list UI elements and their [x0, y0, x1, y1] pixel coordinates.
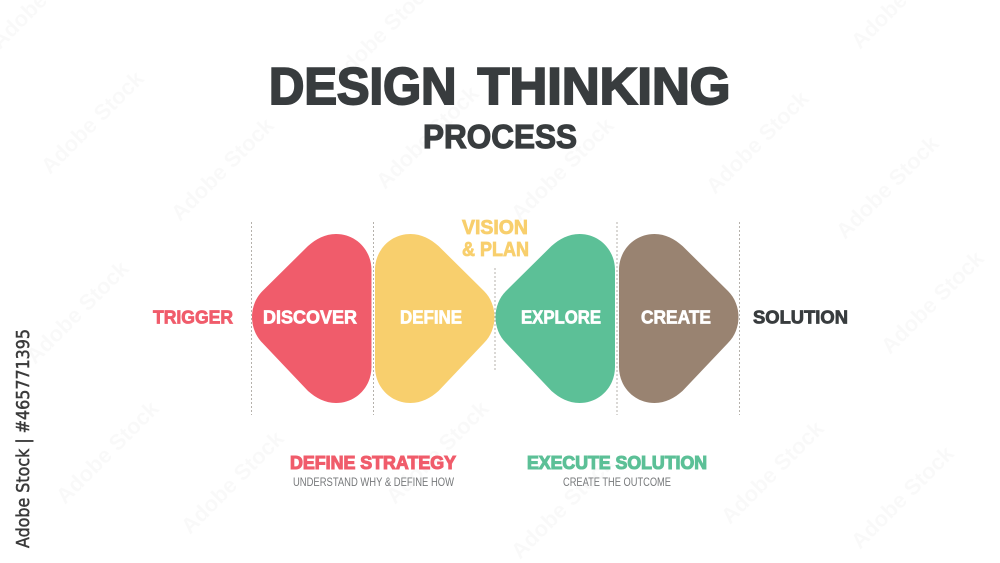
define shape: [375, 234, 494, 403]
execute solution block: EXECUTE SOLUTION: [527, 453, 707, 473]
execute solution block: CREATE THE OUTCOME: [563, 475, 671, 489]
discover shape: [252, 234, 372, 403]
text: Adobe Stock: [506, 112, 619, 226]
execute solution block: [527, 453, 707, 489]
define strategy block: DEFINE STRATEGY: [290, 453, 456, 473]
text: Adobe Stock: [381, 395, 494, 509]
text: Adobe Stock: [176, 425, 289, 539]
trigger label: TRIGGER: [153, 306, 233, 328]
define strategy block: [290, 453, 456, 489]
text: Adobe Stock: [831, 130, 944, 244]
text: Adobe Stock: [701, 85, 814, 199]
title: [269, 58, 730, 116]
text: Adobe Stock: [876, 245, 989, 359]
title: THINKING: [478, 58, 730, 116]
vision and plan label: VISION: [462, 217, 528, 239]
define strategy block: UNDERSTAND WHY & DEFINE HOW: [293, 475, 455, 489]
stock id side text: Adobe Stock | #465771395: [13, 329, 34, 548]
vision and plan label: [462, 217, 529, 261]
text: Adobe Stock: [506, 450, 619, 563]
solution label: SOLUTION: [753, 306, 848, 328]
text: Adobe Stock: [51, 395, 164, 509]
text: Adobe Stock: [371, 80, 484, 194]
text: Adobe Stock: [36, 65, 149, 179]
vision and plan label: & PLAN: [462, 239, 529, 261]
explore shape: EXPLORE: [521, 306, 601, 328]
text: Adobe Stock: [21, 255, 134, 369]
text: Adobe Stock: [846, 440, 959, 554]
subtitle: PROCESS: [423, 118, 577, 155]
text: Adobe Stock: [166, 112, 279, 226]
define shape: DEFINE: [400, 306, 462, 328]
title: DESIGN: [269, 58, 456, 116]
text: Adobe Stock: [716, 415, 829, 529]
create shape: CREATE: [641, 306, 711, 328]
create shape: [619, 234, 738, 403]
explore shape: [496, 234, 615, 403]
discover shape: DISCOVER: [263, 306, 357, 328]
